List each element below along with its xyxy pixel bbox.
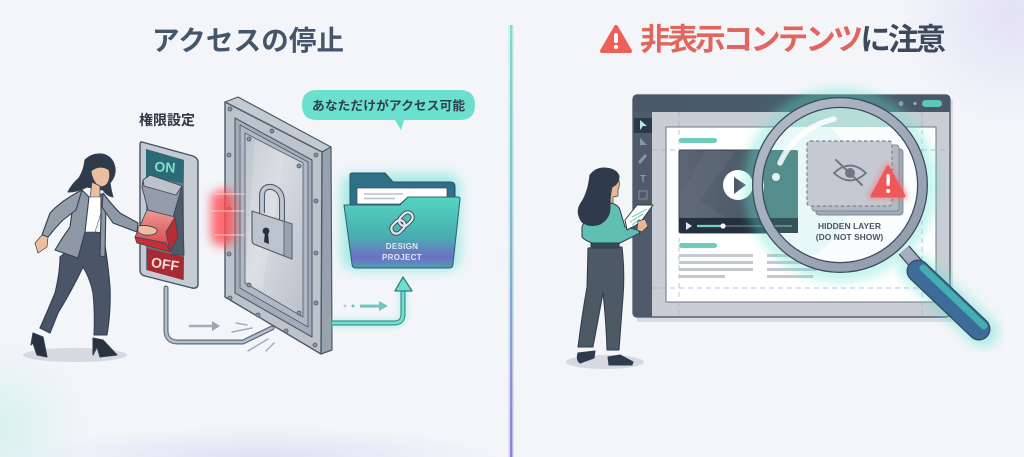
title: hidden content warning (602, 23, 946, 57)
ON label: ON (154, 158, 176, 176)
panel: hidden content illustration (566, 95, 984, 369)
gray arrow and sparks (190, 321, 274, 351)
editor window (633, 95, 953, 322)
dotted small arrow (344, 301, 388, 311)
handle neck (904, 250, 917, 265)
video player (679, 150, 798, 233)
ON label (146, 149, 184, 183)
hand on lever (138, 225, 157, 235)
folder: design project (342, 173, 460, 270)
magnifying glass (695, 95, 984, 332)
tool sidebar icons: T (640, 174, 646, 185)
hidden layer label: (DO NOT SHOW) (816, 232, 883, 242)
door bolts (227, 107, 318, 347)
icon: crossed-out eye (834, 160, 866, 185)
lens interior (763, 108, 909, 257)
document held (625, 205, 653, 230)
title: access stop: アクセスの停止 (152, 25, 344, 56)
panel: access stop illustration (23, 90, 475, 362)
callout: only you can access: あなただけがアクセス可能 (312, 98, 465, 113)
toggle switch (135, 142, 198, 288)
label: permission settings: 権限設定 (139, 112, 195, 128)
OFF label: OFF (150, 254, 181, 274)
folder label: DESIGN (386, 242, 418, 251)
woman pressing switch (23, 154, 138, 362)
tool sidebar icons (634, 118, 652, 199)
woman viewing document (566, 168, 653, 369)
heading text: 非表示コンテンツに注意 (640, 23, 946, 57)
lens highlight (772, 119, 834, 181)
icon: red warning triangle (871, 166, 905, 196)
guide lines (652, 112, 950, 317)
icon: chain link (389, 210, 415, 236)
handle (918, 268, 984, 329)
play button (723, 170, 753, 200)
cable from switch (166, 288, 272, 342)
folder label: PROJECT (382, 253, 422, 262)
icon: title warning triangle (602, 27, 630, 51)
teal access arrow (332, 277, 412, 323)
lens ring (758, 102, 922, 268)
teal glow (750, 95, 983, 332)
callout: only you can access (302, 90, 475, 130)
OFF label (147, 248, 184, 280)
center divider (508, 25, 514, 457)
window controls (898, 100, 942, 107)
text placeholders (679, 138, 840, 278)
steel door (225, 97, 332, 354)
page canvas (666, 127, 936, 302)
hidden layer label: HIDDEN LAYER (818, 221, 881, 231)
lever (135, 175, 184, 255)
padlock (252, 187, 292, 259)
hidden layer stack (807, 141, 903, 215)
red blocked signal glow (211, 190, 245, 246)
